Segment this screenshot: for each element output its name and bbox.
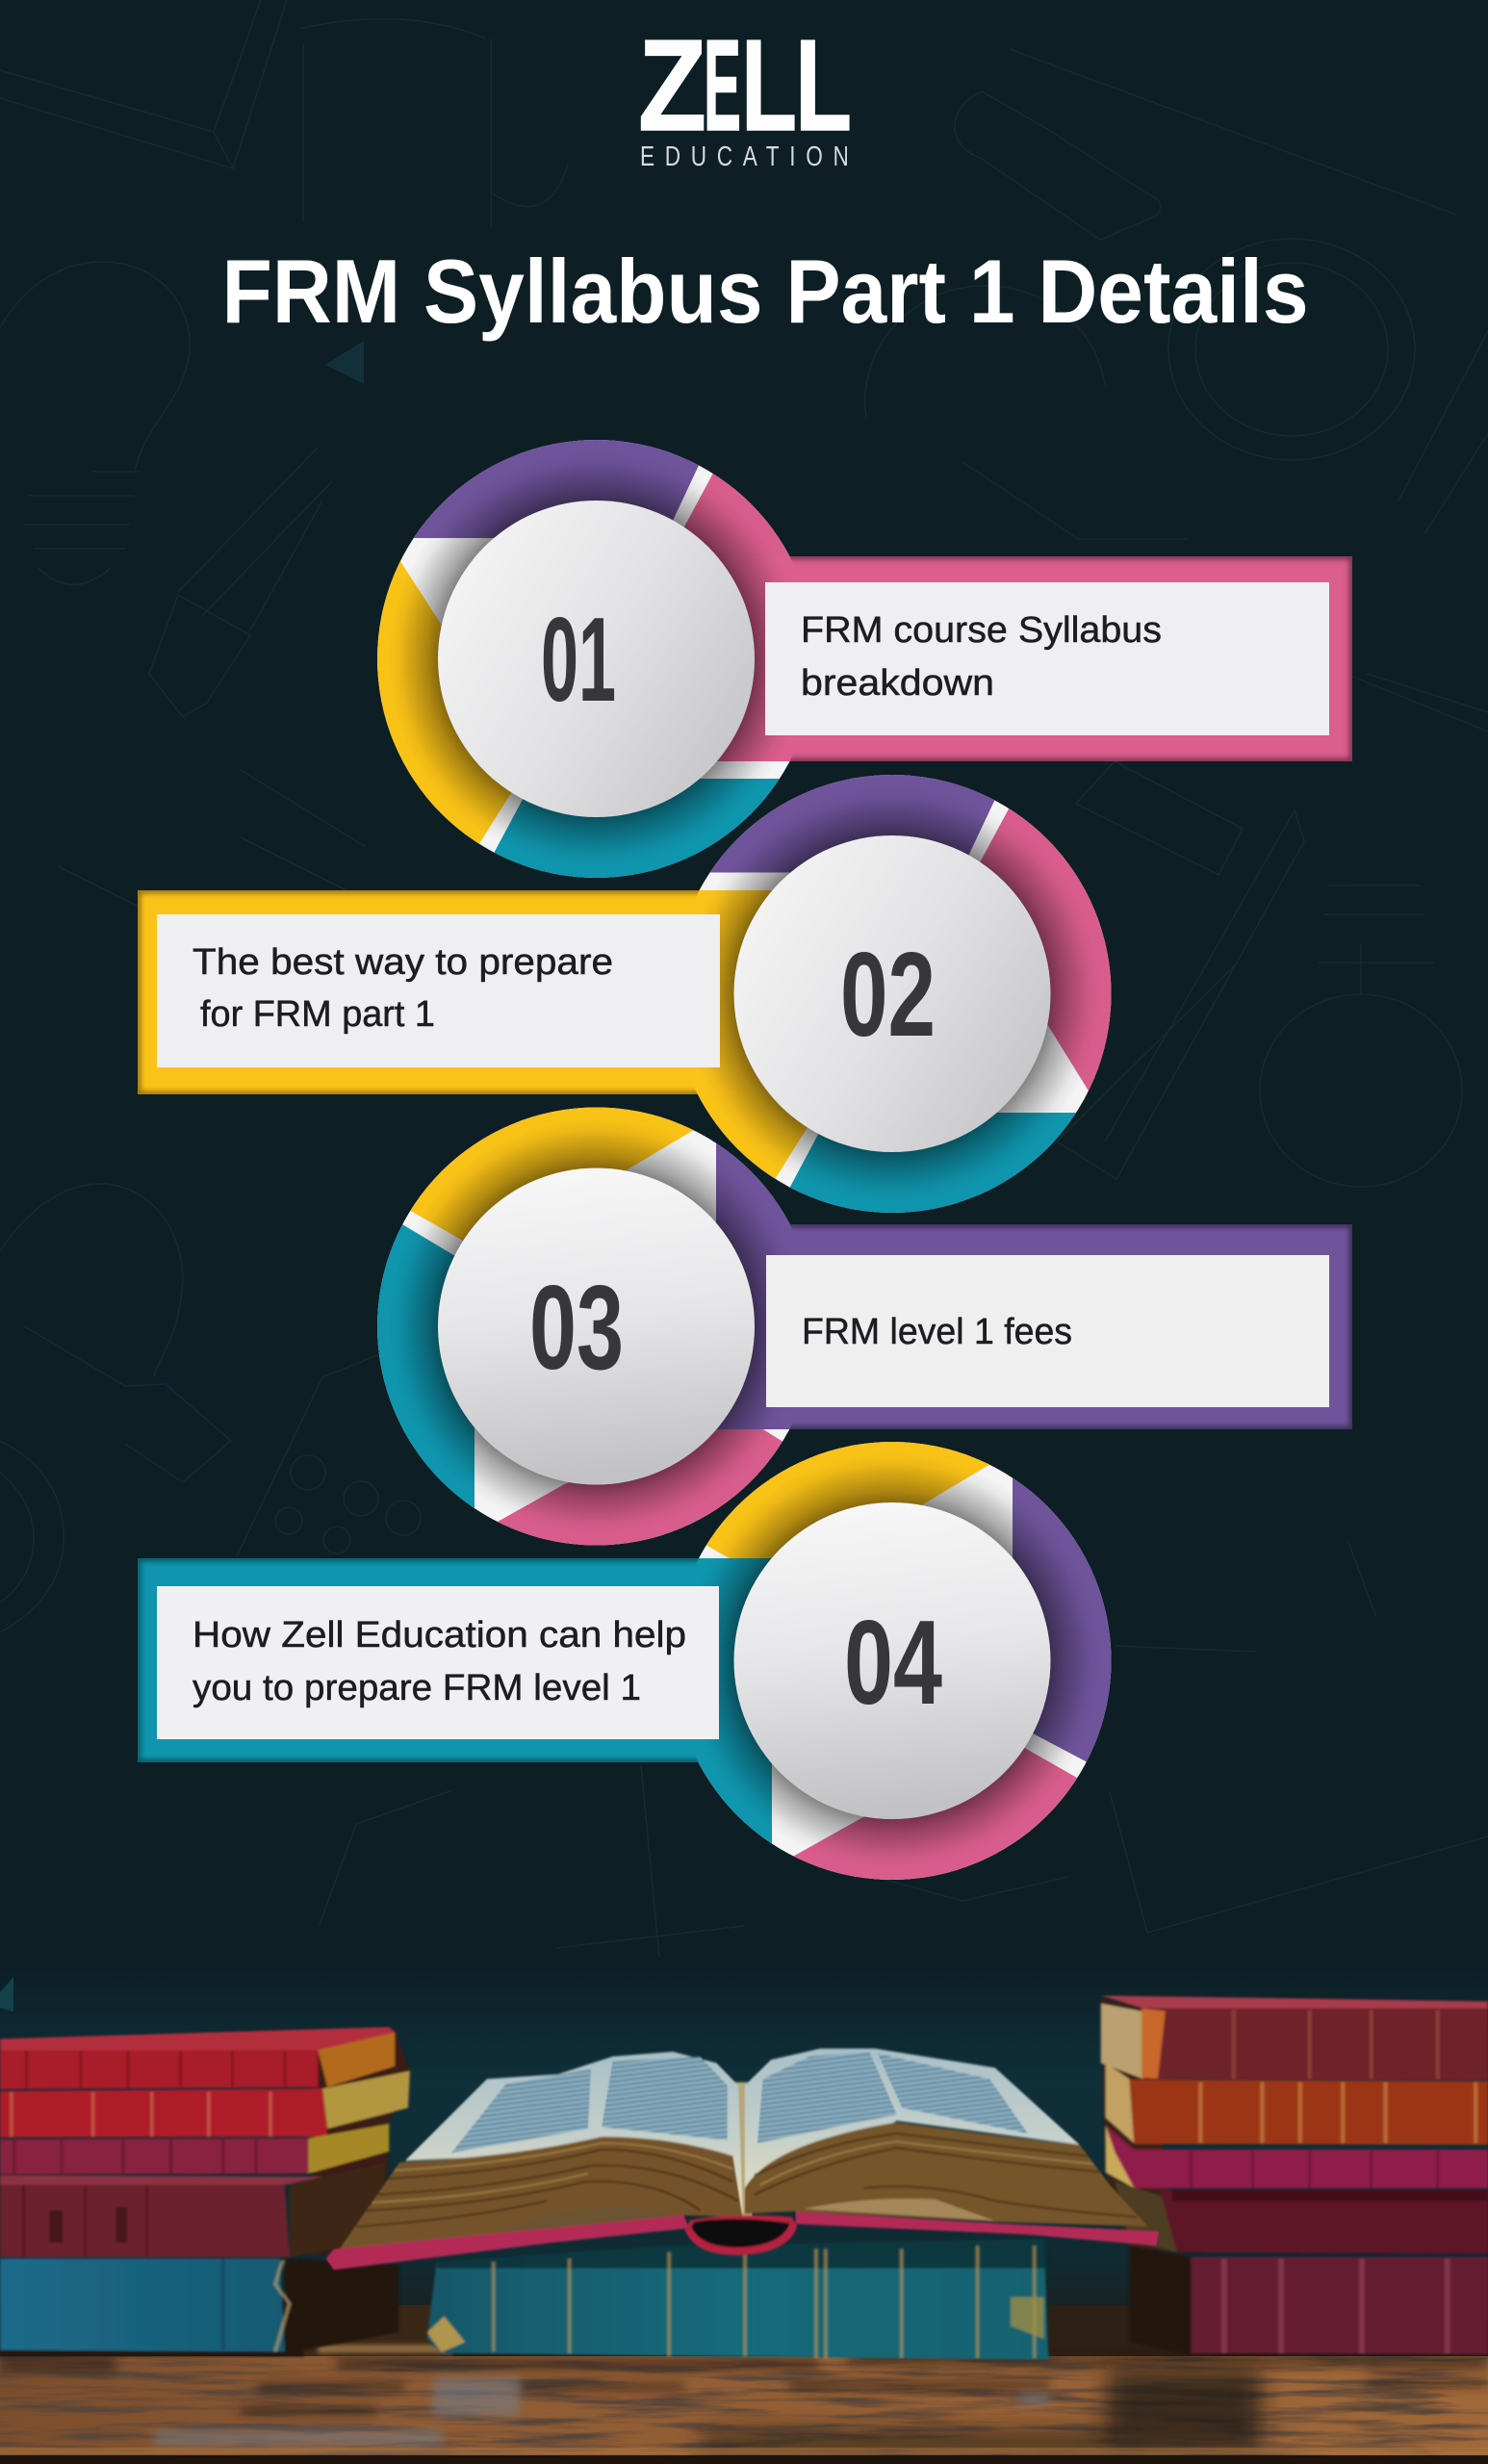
label text box 04 xyxy=(157,1586,719,1739)
right book stack xyxy=(1101,1995,1488,2354)
decorative triangle lower left xyxy=(0,1977,13,2012)
logo wordmark xyxy=(638,13,852,158)
ring segments 02 xyxy=(698,775,1111,1213)
number disc 03 xyxy=(438,1168,755,1484)
right page xyxy=(745,2048,1080,2211)
ring segments 03 xyxy=(377,1107,790,1546)
label text box 01 xyxy=(765,582,1329,735)
label text box 04: you to prepare FRM level 1 xyxy=(192,1668,641,1708)
book one xyxy=(1101,1995,1488,2081)
label text box 02 xyxy=(157,914,720,1067)
ring shadow 01 xyxy=(377,440,815,878)
number disc 04 xyxy=(733,1502,1051,1819)
label panel 03 xyxy=(716,1224,1352,1429)
stack backing xyxy=(1101,1999,1177,2252)
left book stack xyxy=(0,2027,410,2356)
decorative triangle xyxy=(325,341,364,384)
table dark stain xyxy=(703,2370,1261,2454)
step 04 xyxy=(138,1442,1111,1880)
logo wordmark: Z xyxy=(638,13,706,158)
book cover and spine xyxy=(326,2211,1159,2270)
logo wordmark: E xyxy=(704,13,741,158)
book five xyxy=(1129,2246,1488,2354)
number disc 01: 01 xyxy=(541,594,616,727)
table dark grain xyxy=(0,2356,1488,2415)
label text box 02: The best way to prepare xyxy=(192,942,613,983)
number disc 02 xyxy=(733,835,1051,1152)
right page block xyxy=(745,2122,1148,2226)
book four xyxy=(1116,2182,1488,2254)
number disc 01 xyxy=(438,500,755,817)
logo wordmark: L xyxy=(741,13,797,158)
label text box 04: How Zell Education can help xyxy=(192,1615,686,1656)
left page xyxy=(405,2052,743,2214)
label text box 03 xyxy=(766,1255,1329,1407)
ring segments 01 xyxy=(377,440,789,878)
shadowed floor under stack xyxy=(0,2317,304,2356)
ring shadow 02 xyxy=(674,775,1111,1213)
ring shadow 04 xyxy=(674,1442,1111,1880)
label text box 02: for FRM part 1 xyxy=(200,994,435,1035)
number disc 03: 03 xyxy=(529,1262,624,1395)
label text box 01: breakdown xyxy=(801,663,994,704)
logo tagline: EDUCATION xyxy=(640,140,849,172)
ring shadow 03 xyxy=(377,1107,815,1546)
logo: Zell Education xyxy=(638,13,852,172)
red book xyxy=(0,2027,395,2090)
title: FRM Syllabus Part 1 Details xyxy=(221,241,1309,342)
step 01 xyxy=(308,370,1352,947)
ring segments 04 xyxy=(699,1442,1111,1880)
page gutter xyxy=(732,2082,752,2217)
label panel 04 xyxy=(138,1558,772,1762)
open book xyxy=(326,2048,1159,2270)
step 03 xyxy=(308,1038,1352,1615)
step 02 xyxy=(138,705,1181,1282)
second red book xyxy=(0,2071,410,2138)
book scene backdrop xyxy=(0,1964,1488,2358)
book two xyxy=(1106,2063,1488,2144)
stack backing xyxy=(313,2029,410,2257)
logo wordmark: L xyxy=(795,13,852,158)
label panel 01 xyxy=(717,556,1352,761)
blue book xyxy=(0,2259,398,2353)
book three xyxy=(1106,2125,1488,2188)
number disc 04: 04 xyxy=(844,1597,942,1730)
wooden table xyxy=(0,2356,1488,2464)
label panel 02 xyxy=(138,890,772,1094)
background doodles xyxy=(0,0,1488,1958)
table grey patches xyxy=(154,2377,1049,2446)
teal book under open book xyxy=(427,2240,1049,2360)
table front edge xyxy=(0,2448,1488,2464)
number disc 02: 02 xyxy=(840,929,936,1062)
label text box 01: FRM course Syllabus xyxy=(801,610,1162,651)
label text box 03: FRM level 1 fees xyxy=(802,1312,1072,1352)
floor behind books xyxy=(289,2305,1213,2356)
left page block xyxy=(340,2137,743,2249)
dark red book xyxy=(0,2163,384,2257)
crimson book xyxy=(0,2124,389,2174)
